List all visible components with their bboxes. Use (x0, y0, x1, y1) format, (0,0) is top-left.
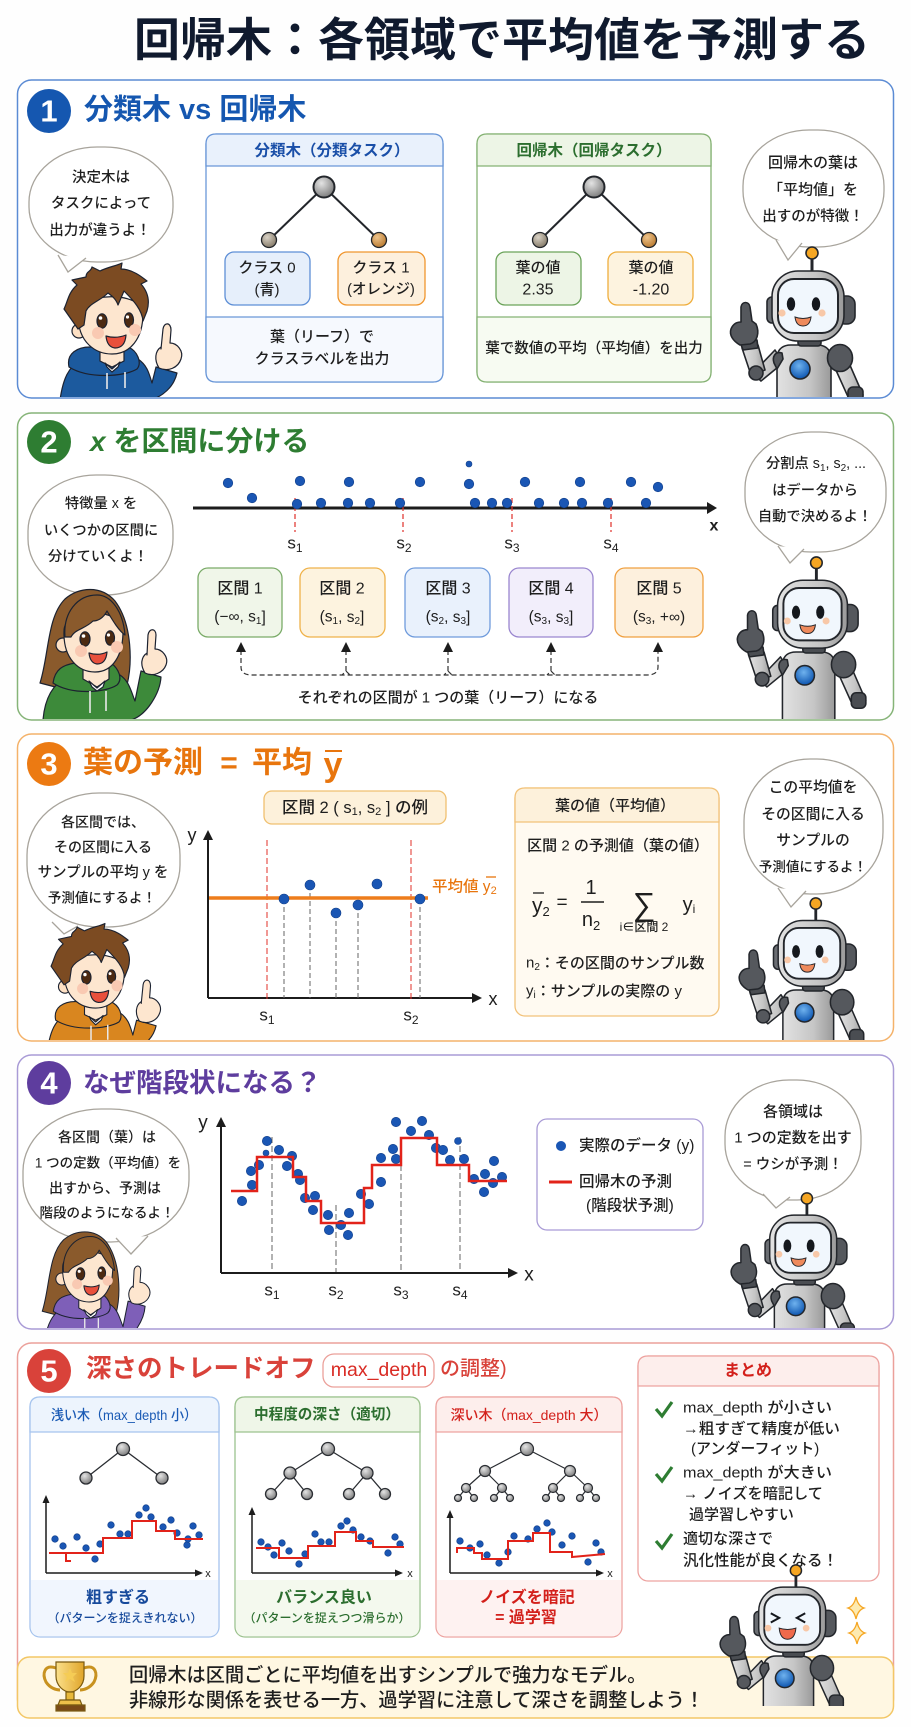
leaf: class 1: クラス 1 (352, 260, 410, 276)
chart: interval mean: 平均値 y (432, 878, 491, 896)
heading 1: 分類木 vs 回帰木 (84, 93, 306, 126)
leaf: value -1.20: -1.20 (633, 282, 669, 298)
box: leaf value formula: ：その区間のサンプル数 (540, 954, 704, 972)
legend (537, 1119, 703, 1230)
panel: section 2 split x into intervals (18, 413, 894, 722)
caption: interval becomes a leaf: それぞれの区間が 1 つの葉（リーフ）になる (298, 688, 598, 706)
number line chart: 2 (405, 541, 412, 555)
speech bubble: left 2: 特徴量 x を (65, 495, 137, 512)
formula: 1 (585, 877, 597, 899)
interval 5: 3 (646, 616, 652, 626)
tree diagram (262, 176, 386, 248)
character: girl purple hoodie (42, 1231, 150, 1328)
speech bubble: right 4 (725, 1080, 861, 1208)
formula: 2 (542, 904, 550, 918)
tag: interval 2 example: ] の例 (381, 798, 428, 817)
badge 2: 2 (40, 424, 58, 460)
card: shallow tree: 浅い木（max_depth 小） (51, 1407, 197, 1423)
formula: ∑ (633, 886, 655, 922)
chart: interval mean: s (259, 1006, 268, 1024)
interval 3: , s (444, 608, 461, 626)
leaf: class 0: (青) (254, 282, 280, 298)
speech bubble: left 1: タスクによって (51, 195, 151, 212)
heading 3: = (220, 746, 238, 780)
interval 1: 1 (256, 616, 262, 626)
chart: interval mean: 2 (412, 1013, 419, 1027)
check icons (656, 1402, 672, 1548)
heading 2: x を区間に分ける (88, 426, 309, 456)
card: classification tree: クラスラベルを出力 (255, 350, 389, 368)
chart: interval mean: x (488, 989, 498, 1009)
speech bubble: left 3: サンプルの平均 y を (38, 864, 168, 881)
formula (532, 877, 695, 934)
speech bubble: right 2 (745, 432, 886, 563)
speech bubble: right 2: 1 (820, 462, 826, 474)
heading 4: なぜ階段状になる？ (83, 1068, 322, 1098)
shallow chart: x (205, 1568, 211, 1580)
interval 1: ] (261, 608, 266, 626)
interval 1: 区間 1 (217, 580, 263, 598)
box: leaf value formula (515, 788, 719, 1016)
box: summary: 汎化性能が良くなる！ (683, 1550, 838, 1570)
heading 5: の調整) (440, 1357, 507, 1380)
chart: staircase prediction: y (198, 1112, 208, 1134)
box: summary: 適切な深さで (683, 1530, 773, 1548)
chart: interval mean: 1 (268, 1013, 275, 1027)
chart: staircase prediction: s (393, 1280, 402, 1300)
chart: staircase prediction: 1 (273, 1288, 280, 1302)
interval 4: 3 (542, 616, 548, 626)
number line chart: s (504, 534, 513, 552)
card: classification tree (206, 134, 443, 382)
chart: interval mean: s (403, 1006, 412, 1024)
medium tree diagram (266, 1442, 390, 1500)
chart: staircase prediction: s (452, 1280, 461, 1300)
card: classification tree: 分類木（分類タスク） (254, 142, 410, 160)
box: summary: max_depth が大きい (683, 1464, 832, 1482)
speech bubble: right 3: サンプルの (776, 832, 850, 849)
robot 5 happy (720, 1565, 843, 1723)
interval 4: ] (569, 608, 573, 626)
leaf: value 2.35 (496, 252, 581, 305)
card: shallow tree: （パターンを捉えきれない） (47, 1611, 203, 1625)
interval 1: (−∞, s (214, 608, 256, 626)
badge 4: 4 (40, 1066, 58, 1100)
card: medium tree: （パターンを捉えつつ滑らか） (243, 1610, 411, 1625)
formula: = (556, 892, 568, 914)
speech bubble: left 4 (23, 1109, 189, 1254)
speech bubble: left 3 (27, 793, 180, 934)
card: regression tree: 回帰木（回帰タスク） (516, 142, 672, 160)
leaf: class 1: (オレンジ) (347, 282, 415, 298)
icon: trophy (44, 1662, 96, 1711)
interval 2: ] (360, 608, 364, 626)
speech bubble: right 2: , ... (846, 456, 866, 472)
chart: staircase prediction: s (264, 1280, 273, 1300)
speech bubble: left 4: 階段のようになるよ！ (40, 1206, 174, 1220)
interval 4: 3 (563, 616, 569, 626)
interval 2: (s (320, 608, 333, 626)
box: leaf value formula: ：サンプルの実際の y (536, 982, 682, 1000)
tag: interval 2 example: 1 (352, 806, 358, 818)
leaf: class 0 (225, 252, 310, 305)
speech bubble: left 2: いくつかの区間に (44, 522, 158, 539)
robot 1 (730, 247, 863, 417)
interval 4: (s (529, 608, 542, 626)
speech bubble: right 1: 「平均値」を (768, 182, 858, 198)
number line chart: s (396, 534, 405, 552)
badge 5: 5 (40, 1354, 58, 1388)
speech bubble: left 4: 1 つの定数（平均値）を (35, 1156, 181, 1170)
badge 1: 1 (40, 94, 58, 128)
formula: n (582, 909, 593, 931)
interval 4: , s (547, 608, 564, 626)
arrows: intervals to leaves (236, 642, 663, 675)
box: summary: max_depth が小さい (683, 1398, 832, 1416)
speech bubble: right 3: この平均値を (769, 779, 857, 796)
chart: staircase prediction: 2 (337, 1288, 344, 1302)
interval 3: 2 (439, 616, 445, 626)
box: summary: →粗すぎて精度が低い (683, 1420, 840, 1438)
leaf: value 2.35: 2.35 (522, 282, 554, 298)
badge 4 (27, 1061, 71, 1105)
badge 1 (27, 89, 71, 133)
shallow tree diagram (80, 1442, 168, 1484)
tag: interval 2 example: , s (358, 799, 375, 817)
chart: staircase prediction: 4 (461, 1288, 468, 1302)
heading 3: y (324, 746, 343, 784)
box: leaf value formula: 葉の値（平均値） (555, 798, 675, 814)
interval 2 (300, 568, 385, 637)
number line chart: 3 (513, 541, 520, 555)
badge 3 (27, 742, 71, 786)
speech bubble: left 4: 各区間（葉）は (58, 1129, 156, 1145)
speech bubble: right 1: 出すのが特徴！ (762, 207, 864, 225)
heading 3 (83, 746, 343, 784)
deep chart (446, 1510, 613, 1580)
medium chart: x (407, 1568, 413, 1580)
chart: staircase prediction: x (524, 1264, 534, 1286)
formula: i∈区間 2 (620, 920, 669, 934)
speech bubble: right 2: , s (826, 456, 841, 472)
leaf: value 2.35: 葉の値 (515, 260, 561, 276)
badge 3: 3 (40, 746, 58, 782)
speech bubble: left 3: 各区間では、 (61, 814, 145, 830)
speech bubble: left 1: 決定木は (72, 169, 130, 186)
card: medium tree: 中程度の深さ（適切） (254, 1405, 400, 1423)
number line chart: s (603, 534, 612, 552)
box: leaf value formula: n (526, 954, 534, 972)
character: boy blue hoodie (60, 263, 182, 400)
interval 5: (s (633, 608, 646, 626)
panel: section 3 leaf prediction (18, 734, 894, 1058)
number line chart: 4 (612, 541, 619, 555)
chart: interval mean: 2 (491, 885, 497, 897)
banner: conclusion: 回帰木は区間ごとに平均値を出すシンプルで強力なモデル。 (129, 1664, 646, 1686)
chart: staircase prediction (198, 1112, 534, 1302)
speech bubble: right 4: 各領域は (763, 1102, 823, 1120)
card: deep tree: = 過学習 (495, 1608, 557, 1626)
formula: y (532, 894, 542, 918)
speech bubble: left 3: 予測値にするよ！ (48, 890, 156, 906)
speech bubble: left 4: 出すから、予測は (49, 1180, 161, 1196)
interval 3: (s (426, 608, 439, 626)
leaf: value -1.20: 葉の値 (628, 260, 674, 276)
chart: interval mean: y (188, 825, 196, 845)
interval 2: 区間 2 (319, 580, 365, 598)
interval 5: 区間 5 (636, 580, 682, 598)
card: medium tree (235, 1397, 420, 1637)
medium chart (248, 1507, 413, 1580)
box: summary (638, 1356, 879, 1581)
card: medium tree: バランス良い (276, 1588, 372, 1606)
interval 3: 区間 3 (425, 580, 471, 598)
interval 3: ] (466, 608, 470, 626)
speech bubble: left 1: 出力が違うよ！ (49, 221, 151, 239)
box: summary: (アンダーフィット) (691, 1440, 819, 1458)
speech bubble: left 2 (28, 475, 173, 595)
character: boy orange hoodie (47, 923, 160, 1051)
badge 2 (27, 420, 71, 464)
box: leaf value formula: 区間 2 の予測値（葉の値） (527, 838, 709, 854)
card: shallow tree: 粗すぎる (86, 1588, 150, 1606)
interval 2: , s (338, 608, 355, 626)
box: leaf value formula: i (534, 990, 536, 1000)
robot 4 (730, 1192, 856, 1328)
formula: i (693, 902, 695, 916)
heading 5: 深さのトレードオフ (86, 1355, 316, 1383)
tag: interval 2 example: 区間 2 ( s (282, 799, 352, 817)
banner: conclusion (18, 1657, 894, 1718)
card: deep tree: 深い木（max_depth 大） (450, 1407, 608, 1423)
interval 4: 区間 4 (528, 580, 574, 598)
number line chart (193, 461, 719, 555)
legend: (階段状予測) (586, 1196, 674, 1214)
speech bubble: right 1: 回帰木の葉は (768, 154, 858, 172)
number line chart: 1 (296, 541, 303, 555)
number line chart: s (287, 534, 296, 552)
shallow chart (42, 1495, 211, 1580)
panel: section 1 classification vs regression (18, 80, 894, 417)
card: shallow tree (30, 1397, 219, 1637)
speech bubble: right 3 (744, 759, 883, 907)
interval 1 (198, 568, 282, 637)
box: summary: 過学習しやすい (689, 1506, 794, 1524)
speech bubble: left 2: 分けていくよ！ (48, 548, 148, 565)
speech bubble: left 3: その区間に入る (54, 839, 152, 855)
card: deep tree: ノイズを暗記 (479, 1588, 575, 1606)
box: leaf value formula: 2 (534, 962, 540, 972)
heading 5 (86, 1354, 507, 1387)
title: 回帰木：各領域で平均値を予測する (134, 14, 870, 66)
interval 5 (615, 568, 703, 637)
deep chart: x (607, 1568, 613, 1580)
number line chart: x (710, 518, 719, 534)
legend: 実際のデータ (y) (579, 1136, 694, 1154)
speech bubble: right 4: 1 つの定数を出す (734, 1130, 852, 1146)
tag: interval 2 example (264, 791, 446, 824)
speech bubble: right 3: 予測値にするよ！ (759, 860, 867, 874)
interval 2: 2 (354, 616, 360, 626)
banner: conclusion: 非線形な関係を表せる一方、過学習に注意して深さを調整しよう！ (129, 1690, 704, 1712)
speech bubble: right 1 (743, 130, 884, 260)
heading 3: 葉の予測 (83, 746, 203, 780)
speech bubble: left 1 (29, 147, 173, 272)
speech bubble: right 3: その区間に入る (761, 806, 865, 823)
robot 2 (737, 557, 866, 722)
box: leaf value formula: y (526, 982, 534, 1000)
leaf: value -1.20 (608, 252, 693, 305)
leaf: class 0: クラス 0 (238, 260, 296, 276)
interval 5: , +∞) (651, 608, 685, 626)
interval 3: 3 (460, 616, 466, 626)
chart: staircase prediction: 3 (402, 1288, 409, 1302)
panel: section 5 depth tradeoff (18, 1343, 894, 1713)
tree diagram (532, 176, 656, 248)
speech bubble: right 2: 自動で決めるよ！ (758, 508, 872, 525)
interval 4 (509, 568, 593, 637)
deep tree diagram (454, 1442, 600, 1502)
character: girl green hoodie (40, 590, 167, 720)
heading 5: max_depth (331, 1359, 427, 1381)
legend: 回帰木の予測 (579, 1172, 672, 1190)
icon: sparkles (848, 1597, 865, 1644)
speech bubble: right 4: = ウシが予測！ (743, 1155, 843, 1173)
formula: y (683, 894, 693, 916)
speech bubble: right 2: 2 (841, 462, 847, 474)
heading 3: 平均 (252, 746, 312, 780)
card: deep tree (436, 1397, 622, 1637)
badge 5 (27, 1349, 71, 1393)
box: summary: まとめ (724, 1362, 772, 1380)
leaf: class 1 (338, 252, 425, 305)
box: summary: → ノイズを暗記して (683, 1484, 823, 1502)
tag: interval 2 example: 2 (375, 806, 381, 818)
card: regression tree (477, 134, 711, 382)
interval 2: 1 (333, 616, 339, 626)
card: regression tree: 葉で数値の平均（平均値）を出力 (485, 340, 703, 357)
panel: section 4 why staircase (18, 1055, 894, 1351)
interval 3 (405, 568, 490, 637)
chart: interval mean (188, 825, 498, 1027)
speech bubble: right 2: はデータから (772, 481, 858, 499)
formula: 2 (593, 918, 600, 932)
card: classification tree: 葉（リーフ）で (270, 328, 374, 346)
robot 3 (739, 898, 864, 1058)
chart: staircase prediction: s (328, 1280, 337, 1300)
speech bubble: right 2: 分割点 s (766, 456, 820, 472)
